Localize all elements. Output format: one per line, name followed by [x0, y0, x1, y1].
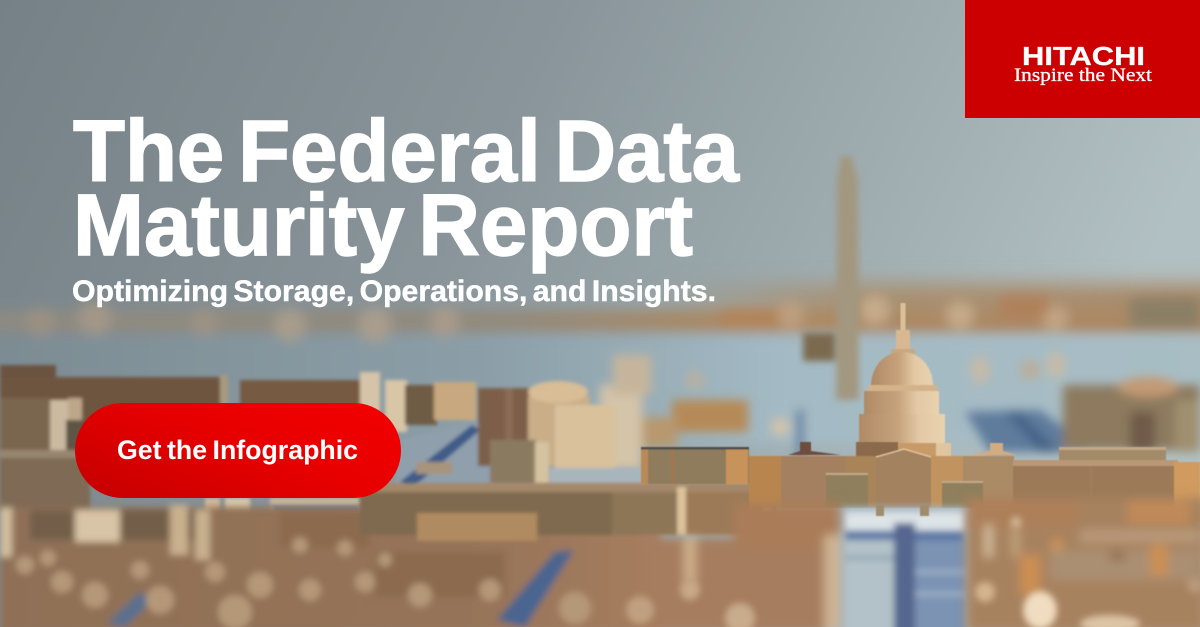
- logo panel: hitachi: [965, 0, 1200, 118]
- subtitle: Optimizing Storage, Operations, and Insights.: [72, 275, 716, 308]
- long mid building: [360, 483, 775, 541]
- foreground bokeh: left: [0, 505, 660, 627]
- central mall road: [840, 507, 968, 627]
- background: soft upper horizon glow: [650, 284, 1200, 328]
- title: The Federal Data: [73, 103, 740, 200]
- button: get the infographic: [75, 403, 401, 498]
- capitol: central pediment: [876, 449, 931, 508]
- title: Maturity Report: [73, 177, 693, 274]
- small mall kiosks: [876, 505, 929, 516]
- right blocks: [1013, 447, 1200, 522]
- left city blocks: [0, 365, 645, 538]
- title: [73, 103, 740, 274]
- monument: [803, 156, 859, 400]
- background buildings: far: [600, 352, 1200, 470]
- capitol: dome tiers: [856, 303, 951, 456]
- button: get the infographic: Get the Infographic: [117, 435, 358, 465]
- foreground blurred buildings: centre and right: [640, 498, 1200, 627]
- logo panel: hitachi: Inspire the Next: [1014, 66, 1153, 86]
- logo panel: hitachi: HITACHI: [1022, 43, 1145, 71]
- capitol: main wings: [749, 442, 1017, 508]
- capitol: small front blocks: [826, 473, 983, 508]
- foreground bokeh: right: [626, 517, 1200, 627]
- capitol and central government blocks: [641, 303, 1017, 508]
- background: blurred horizon and water: [0, 295, 1200, 445]
- capitol: left block: [641, 447, 749, 484]
